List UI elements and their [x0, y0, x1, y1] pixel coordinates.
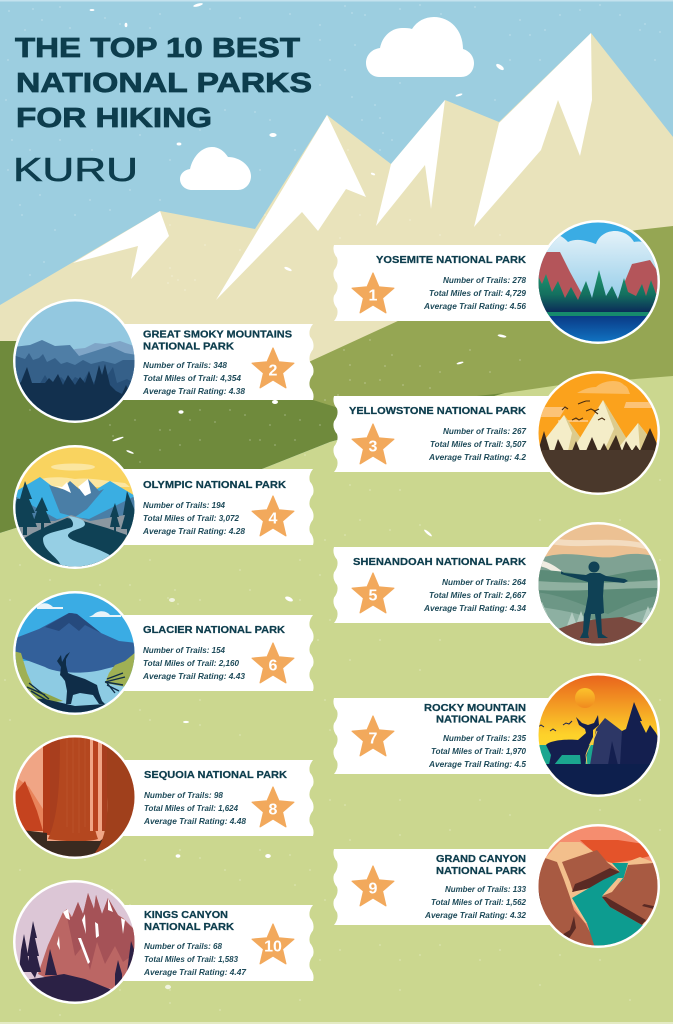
- stats: [142, 646, 246, 681]
- dark green hillside: [0, 341, 505, 533]
- scene: giant redwoods: [13, 735, 137, 859]
- park name: OLYMPIC NATIONAL PARK: [143, 479, 286, 491]
- rank star 6: 6: [269, 658, 278, 674]
- stats: Total Miles of Trail: 2,160: [143, 659, 240, 668]
- rank star 7: 7: [369, 730, 378, 748]
- logo: KURU: KURU: [13, 151, 138, 188]
- stats: Total Miles of Trail: 3,072: [143, 514, 240, 523]
- rank star 1: 1: [369, 288, 378, 304]
- park 9: Grand Canyon: [333, 824, 660, 948]
- banner: [333, 698, 570, 774]
- stats: Total Miles of Trail: 4,354: [143, 374, 242, 383]
- stats: Total Miles of Trail: 4,729: [429, 289, 527, 298]
- banner: [100, 760, 314, 836]
- cloud: large: [366, 17, 474, 77]
- park name: [436, 853, 526, 877]
- rank star 6: [252, 643, 294, 683]
- stats: Average Trail Rating: 4.32: [424, 911, 527, 920]
- title: FOR HIKING: [16, 102, 212, 133]
- title: THE TOP 10 BEST: [15, 32, 300, 63]
- scene: Yosemite valley: [536, 220, 660, 346]
- banner: [333, 245, 570, 321]
- banner: [100, 615, 314, 691]
- rank star 4: 4: [269, 510, 278, 528]
- stats: Number of Trails: 133: [445, 885, 527, 894]
- park name: YOSEMITE NATIONAL PARK: [376, 254, 526, 266]
- stats: Average Trail Rating: 4.43: [142, 672, 246, 681]
- park 10: Kings Canyon: [13, 880, 314, 1004]
- park name: NATIONAL PARK: [144, 921, 234, 933]
- park name: [143, 328, 292, 352]
- park name: GRAND CANYON: [436, 853, 526, 865]
- park name: ROCKY MOUNTAIN: [424, 702, 526, 714]
- rank star 7: [352, 716, 394, 756]
- banner: [333, 396, 570, 472]
- park 6: Glacier: [13, 591, 314, 715]
- park 3: Yellowstone: [333, 371, 660, 496]
- park name: YELLOWSTONE NATIONAL PARK: [349, 405, 526, 417]
- stats: Number of Trails: 154: [143, 646, 226, 655]
- stats: [423, 578, 527, 613]
- stats: Total Miles of Trail: 1,562: [431, 898, 527, 907]
- rank star 5: 5: [369, 588, 378, 604]
- stats: Average Trail Rating: 4.38: [142, 387, 246, 396]
- stats: Average Trail Rating: 4.2: [428, 453, 527, 462]
- stats: [142, 361, 246, 396]
- park 7: Rocky Mountain: [333, 673, 660, 798]
- stats: Average Trail Rating: 4.5: [428, 760, 527, 769]
- rank star 10: 10: [264, 938, 282, 956]
- title: [15, 32, 312, 133]
- stats: [423, 276, 527, 311]
- title: NATIONAL PARKS: [16, 67, 312, 98]
- stats: Average Trail Rating: 4.28: [142, 527, 246, 536]
- park name: NATIONAL PARK: [143, 340, 234, 352]
- stats: Average Trail Rating: 4.48: [143, 817, 247, 826]
- stats: [428, 734, 527, 769]
- rank star 3: [352, 424, 394, 464]
- rank star 1: [352, 273, 394, 313]
- olive hillside: [300, 226, 673, 420]
- stats: Number of Trails: 348: [143, 361, 228, 370]
- stats: [143, 942, 247, 977]
- scene: orange sunset peaks: [536, 371, 660, 496]
- stats: Number of Trails: 235: [443, 734, 527, 743]
- stats: Average Trail Rating: 4.34: [423, 604, 527, 613]
- rank star 9: 9: [369, 880, 378, 898]
- stats: [142, 501, 246, 536]
- park name: [144, 909, 234, 933]
- scene: river valley: [13, 445, 137, 569]
- rank star 2: [252, 348, 294, 388]
- stats: Number of Trails: 264: [442, 578, 527, 587]
- rank star 3: 3: [369, 438, 378, 456]
- stats: Number of Trails: 68: [144, 942, 223, 951]
- banner: [333, 849, 570, 925]
- park name: GREAT SMOKY MOUNTAINS: [143, 328, 292, 340]
- park 2: Great Smoky Mountains: [13, 299, 314, 423]
- rank star 8: 8: [269, 802, 278, 818]
- stats: Number of Trails: 194: [143, 501, 226, 510]
- park 5: Shenandoah: [333, 522, 660, 646]
- stats: [424, 885, 527, 920]
- banner: [333, 547, 570, 623]
- white flecks: [90, 2, 507, 989]
- scene: elk at sunset: [536, 673, 660, 798]
- rank star 10: [252, 924, 294, 964]
- banner: [100, 469, 314, 545]
- scene: hiker above green ridges: [533, 522, 660, 646]
- rank star 4: [252, 496, 294, 536]
- rank star 9: [352, 866, 394, 906]
- scene: blue ridges: [13, 299, 137, 423]
- light green meadow: [0, 376, 673, 1024]
- stats: Total Miles of Trail: 1,970: [431, 747, 527, 756]
- banner: [100, 905, 314, 981]
- stats: Number of Trails: 267: [443, 427, 527, 436]
- stats: Number of Trails: 98: [144, 791, 224, 800]
- scene: jagged pink peak: [13, 880, 137, 1004]
- park name: SEQUOIA NATIONAL PARK: [144, 769, 287, 781]
- park name: KINGS CANYON: [144, 909, 228, 921]
- rank star 5: [352, 573, 394, 613]
- park 8: Sequoia: [13, 735, 314, 859]
- park name: SHENANDOAH NATIONAL PARK: [353, 556, 526, 568]
- stats: Total Miles of Trail: 3,507: [430, 440, 527, 449]
- park 4: Olympic: [13, 445, 314, 569]
- mountain range: [0, 33, 673, 400]
- park name: NATIONAL PARK: [436, 865, 526, 877]
- snow caps: [73, 33, 592, 300]
- stats: Total Miles of Trail: 2,667: [429, 591, 527, 600]
- scene: river canyon: [536, 824, 660, 948]
- park name: [424, 702, 526, 726]
- park name: GLACIER NATIONAL PARK: [143, 624, 285, 636]
- rank star 2: 2: [269, 362, 278, 380]
- park 1: Yosemite: [333, 220, 660, 346]
- scene: mountain lake and goat: [13, 591, 137, 715]
- rank star 8: [252, 787, 294, 827]
- banner: [100, 324, 314, 400]
- cloud: small: [180, 147, 251, 190]
- stats: Average Trail Rating: 4.56: [423, 302, 527, 311]
- stats: Number of Trails: 278: [443, 276, 527, 285]
- stats: [428, 427, 527, 462]
- stats: Average Trail Rating: 4.47: [143, 968, 247, 977]
- stats: Total Miles of Trail: 1,624: [144, 804, 239, 813]
- stats: Total Miles of Trail: 1,583: [144, 955, 239, 964]
- park name: NATIONAL PARK: [436, 714, 526, 726]
- stats: [143, 791, 247, 826]
